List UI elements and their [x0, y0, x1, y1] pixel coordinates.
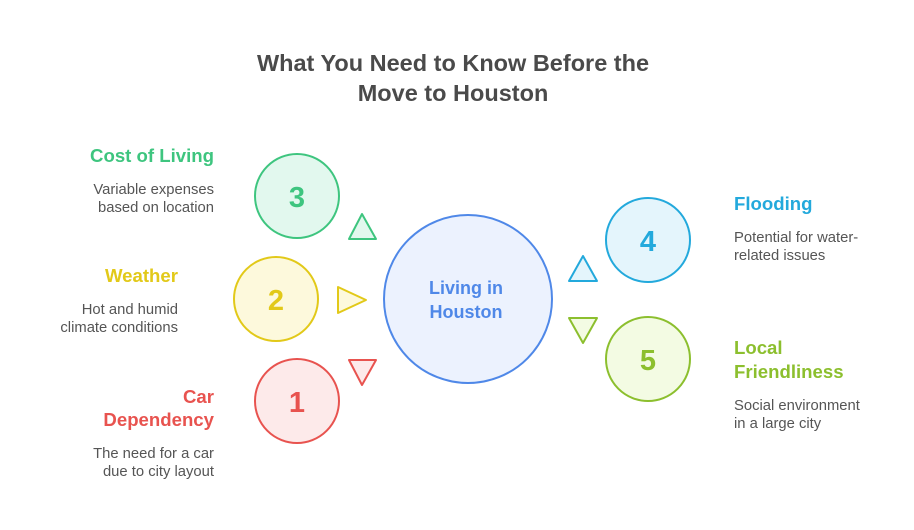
text: Flooding	[734, 193, 858, 264]
text: Cost of Living: Cost of Living	[90, 145, 214, 166]
arrow: yellow right	[338, 287, 366, 313]
text: Cost of Living: based on location	[98, 200, 214, 216]
text: Weather	[60, 265, 178, 336]
circle 2: 2	[268, 285, 284, 317]
text: Weather: Hot and humid	[82, 302, 178, 318]
circle 5	[606, 317, 690, 401]
text: Weather: climate conditions	[60, 320, 178, 336]
arrow: green up	[349, 214, 376, 239]
center circle: Living in Houston: Living in	[429, 278, 503, 298]
text: Cost of Living	[90, 145, 214, 216]
center circle: Living in Houston: Houston	[430, 302, 502, 322]
circle 4	[606, 198, 690, 282]
circle 5: 5	[640, 345, 656, 377]
arrow: blue up	[569, 256, 597, 281]
title: What You Need to Know Before the	[257, 50, 649, 76]
text: Cost of Living: Variable expenses	[93, 182, 214, 198]
title	[257, 50, 649, 106]
text: Car Dependency	[93, 386, 215, 480]
circle 3	[255, 154, 339, 238]
arrow: green down	[569, 318, 597, 343]
circle 1	[255, 359, 339, 443]
circle 3: 3	[289, 182, 305, 214]
text: Local Friendliness	[734, 337, 860, 432]
title: Move to Houston	[358, 80, 548, 106]
text: Car Dependency: The need for a car	[93, 446, 214, 462]
text: Local Friendliness: Social environment	[734, 398, 860, 414]
text: Flooding: Potential for water-	[734, 230, 858, 246]
text: Weather: Weather	[105, 265, 178, 286]
text: Local Friendliness: in a large city	[734, 416, 822, 432]
text: Flooding: Flooding	[734, 193, 812, 214]
circle 2	[234, 257, 318, 341]
text: Car Dependency: Dependency	[103, 409, 215, 430]
text: Local Friendliness: Local	[734, 337, 783, 358]
center circle: Living in Houston	[384, 215, 552, 383]
circle 1: 1	[289, 387, 305, 419]
text: Local Friendliness: Friendliness	[734, 361, 844, 382]
arrow: red down	[349, 360, 376, 385]
text: Car Dependency: Car	[183, 386, 214, 407]
text: Car Dependency: due to city layout	[103, 464, 214, 480]
text: Flooding: related issues	[734, 248, 825, 264]
circle 4: 4	[640, 226, 656, 258]
